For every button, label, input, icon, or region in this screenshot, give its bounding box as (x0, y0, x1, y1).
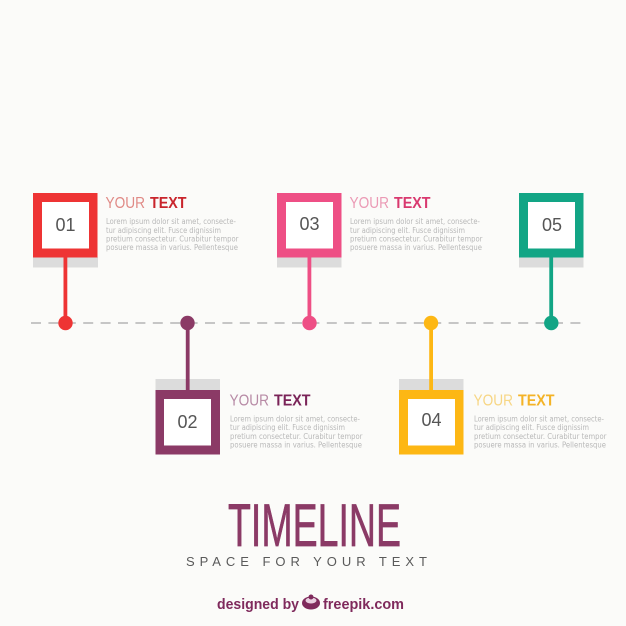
text block 04: tur adipiscing elit. Fusce dignissim (474, 423, 589, 432)
text block 01: pretium consectetur. Curabitur tempor (106, 234, 239, 244)
text block 02: posuere massa in varius. Pellentesque (230, 440, 362, 450)
milestone 05: 05 (542, 215, 562, 235)
text block 02: Lorem ipsum dolor sit amet, consecte- (230, 414, 360, 423)
text block 02 (230, 392, 363, 450)
credit: designed by freepik.com (217, 594, 404, 613)
milestone 04: 04 (421, 410, 442, 430)
subtitle: SPACE FOR YOUR TEXT (186, 554, 427, 569)
text block 03: pretium consectetur. Curabitur tempor (350, 234, 483, 244)
text block 03: TEXT (394, 195, 431, 212)
milestone 02: 02 (177, 412, 198, 432)
text block 03: YOUR (350, 195, 389, 212)
text block 01 (106, 195, 239, 252)
text block 04: TEXT (518, 392, 555, 409)
text block 04: pretium consectetur. Curabitur tempor (474, 432, 607, 441)
credit: designed by freepik.com: designed by (217, 597, 299, 613)
text block 01: TEXT (150, 195, 187, 212)
title: TIMELINE (228, 492, 401, 559)
text block 02: TEXT (274, 392, 311, 409)
milestone 05 (519, 193, 584, 330)
milestone 01: 01 (55, 215, 76, 235)
text block 01: posuere massa in varius. Pellentesque (106, 243, 238, 252)
text block 01: Lorem ipsum dolor sit amet, consecte- (106, 217, 236, 226)
milestone 04 (399, 316, 464, 454)
text block 04 (474, 392, 607, 450)
text block 04: Lorem ipsum dolor sit amet, consecte- (474, 414, 604, 423)
milestone 02 (156, 316, 220, 454)
text block 03: tur adipiscing elit. Fusce dignissim (350, 226, 465, 235)
milestone 03: 03 (299, 214, 320, 234)
text block 02: YOUR (230, 392, 269, 409)
credit: designed by freepik.com: freepik.com (323, 597, 404, 613)
text block 03: Lorem ipsum dolor sit amet, consecte- (350, 217, 480, 226)
icon: freepik logo (302, 594, 320, 610)
text block 04: posuere massa in varius. Pellentesque (474, 440, 606, 450)
text block 03: posuere massa in varius. Pellentesque (350, 243, 482, 252)
milestone 03 (277, 193, 342, 330)
text block 03 (350, 195, 483, 252)
text block 04: YOUR (474, 392, 513, 409)
text block 02: tur adipiscing elit. Fusce dignissim (230, 423, 345, 432)
text block 02: pretium consectetur. Curabitur tempor (230, 432, 363, 441)
text block 01: tur adipiscing elit. Fusce dignissim (106, 226, 221, 235)
text block 01: YOUR (106, 195, 145, 212)
milestone 01 (33, 193, 98, 330)
